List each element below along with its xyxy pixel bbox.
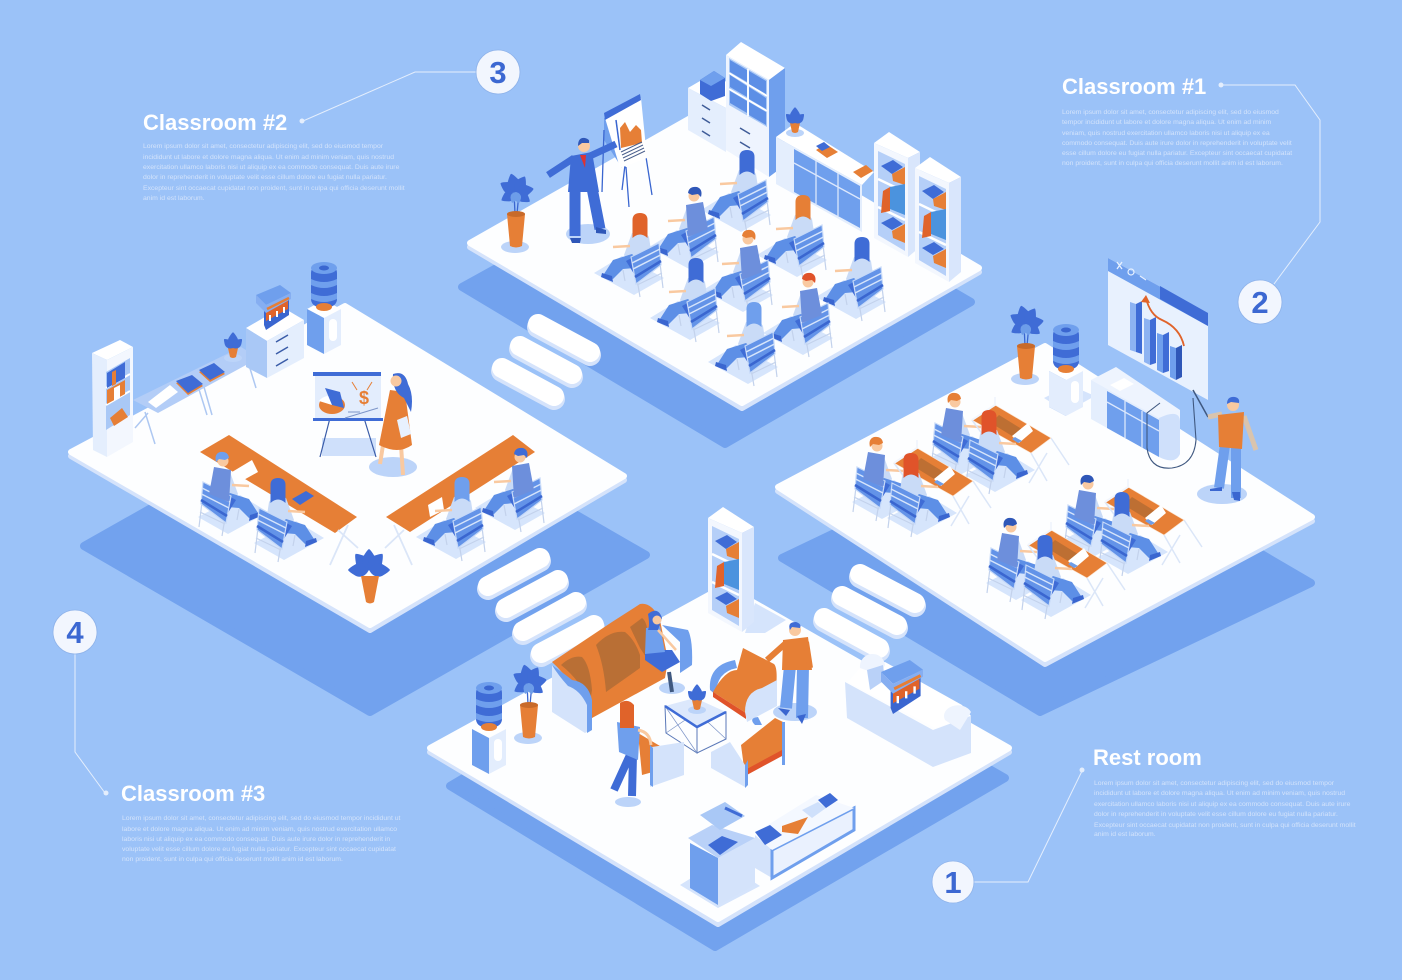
platform shadows xyxy=(84,150,1311,947)
water cooler xyxy=(472,682,506,774)
connector and badge 2: 2 xyxy=(1251,285,1269,320)
panel: classroom 3 right room xyxy=(778,258,1312,664)
stairs between rooms xyxy=(488,324,915,656)
bookshelf xyxy=(92,340,133,457)
armchair top xyxy=(710,648,777,722)
panel: classroom 1 top room xyxy=(470,42,979,408)
plant xyxy=(511,663,548,744)
drawer cabinet and coffee machine xyxy=(246,285,304,378)
coffee table xyxy=(665,684,726,753)
presenter xyxy=(548,138,616,244)
cable and pointer xyxy=(1147,390,1208,468)
easel with charts xyxy=(313,372,383,457)
text: Rest room: dolor in reprehenderit in voluptate velit esse cillum dolore eu fugiat nulla pariatur. xyxy=(1094,811,1338,818)
text: Classroom #3: Lorem ipsum dolor sit amet, consectetur adipiscing elit, sed do eiusmod tempor incididunt ut xyxy=(122,815,401,822)
standing man xyxy=(767,622,817,724)
teacher xyxy=(1197,397,1256,504)
text: Rest room: Excepteur sint occaecat cupidatat non proident, sunt in culpa qui officia deserunt mollit xyxy=(1094,822,1356,829)
panel: rest room bottom xyxy=(430,507,1009,924)
text: Classroom #3: Classroom #3 xyxy=(121,781,265,806)
connector and badge 1: 1 xyxy=(944,865,962,900)
armchair left and standing woman xyxy=(614,701,684,807)
easel with charts: $ xyxy=(359,388,369,408)
connector and badge 4 xyxy=(53,610,108,796)
connector and badge 3: 3 xyxy=(489,55,507,90)
text: Rest room: Lorem ipsum dolor sit amet, consectetur adipiscing elit, sed do eiusmod tempor xyxy=(1094,780,1335,787)
seated woman xyxy=(645,611,685,694)
text: Classroom #1: veniam, quis nostrud exercitation ullamco laboris nisi ut aliquip ex ea xyxy=(1062,130,1270,137)
connector and badge 4: 4 xyxy=(66,615,84,650)
text: Classroom #2: Lorem ipsum dolor sit amet, consectetur adipiscing elit, sed do eiusmod tempor xyxy=(143,143,384,150)
connector and badge 3 xyxy=(300,50,520,124)
bookshelves xyxy=(874,132,920,257)
tables xyxy=(200,435,357,533)
sideboard with books and plant xyxy=(776,107,874,232)
text: Classroom #1 xyxy=(1062,74,1292,167)
text: Classroom #1: Classroom #1 xyxy=(1062,74,1206,99)
small plant xyxy=(221,332,245,362)
text: Classroom #3: laboris nisi ut aliquip ex ea commodo consequat. Duis aute irure dolor in reprehenderit in xyxy=(122,836,390,843)
text: Classroom #2: exercitation ullamco laboris nisi ut aliquip ex ea commodo consequat. Duis aute irure xyxy=(143,164,400,171)
flipchart xyxy=(602,94,652,207)
connector and badge 1 xyxy=(932,768,1084,903)
copier xyxy=(680,802,760,908)
armchair right xyxy=(711,717,785,788)
text: Rest room xyxy=(1093,745,1356,838)
text: Rest room: incididunt ut labore et dolore magna aliqua. Ut enim ad minim veniam, quis nostrud xyxy=(1094,790,1345,797)
text: Classroom #1: Lorem ipsum dolor sit amet, consectetur adipiscing elit, sed do eiusmod xyxy=(1062,109,1279,116)
text: Classroom #2 xyxy=(143,110,405,202)
sideboard xyxy=(1091,367,1180,460)
text: Rest room: anim id est laborum. xyxy=(1094,831,1156,838)
plant xyxy=(498,172,535,253)
text: Classroom #3: non proident, sunt in culpa qui officia deserunt mollit anim id est laborum. xyxy=(122,856,343,863)
plant xyxy=(1008,304,1045,385)
seated people xyxy=(198,448,545,562)
water cooler xyxy=(1044,324,1095,416)
text: Classroom #1: commodo consequat. Duis aute irure dolor in reprehenderit in voluptate velit xyxy=(1062,140,1292,147)
text: Classroom #1: non proident, sunt in culpa qui officia deserunt mollit anim id est laborum. xyxy=(1062,160,1283,167)
text: Classroom #3: labore et dolore magna aliqua. Ut enim ad minim veniam, quis nostrud exercitation ullamco xyxy=(122,826,397,833)
panel: classroom 2 left room xyxy=(71,262,624,630)
text: Classroom #2: anim id est laborum. xyxy=(143,195,205,202)
connector and badge 2 xyxy=(1218,82,1320,324)
text: Classroom #2: incididunt ut labore et dolore magna aliqua. Ut enim ad minim veniam, quis nostrud xyxy=(143,154,394,161)
students in rows xyxy=(594,150,886,386)
text: Rest room: Rest room xyxy=(1093,745,1202,770)
tall cabinet with printer xyxy=(688,42,785,177)
text: Classroom #1: tempor incididunt ut labore et dolore magna aliqua. Ut enim ad minim xyxy=(1062,119,1272,126)
floor plant xyxy=(348,549,390,604)
text: Classroom #3 xyxy=(121,781,401,863)
reception counter with coffee machine xyxy=(845,654,971,767)
text: Classroom #2: Classroom #2 xyxy=(143,110,287,135)
student desks xyxy=(852,393,1202,619)
text: Classroom #2: dolor in reprehenderit in voluptate velit esse cillum dolore eu fugiat nulla pariatur. xyxy=(143,174,387,181)
bookshelf xyxy=(708,507,786,633)
woman presenting xyxy=(369,373,417,477)
water cooler xyxy=(307,262,341,354)
sofa xyxy=(552,604,692,733)
text: Rest room: exercitation ullamco laboris nisi ut aliquip ex ea commodo consequat. Duis aute irure xyxy=(1094,801,1351,808)
document table xyxy=(755,793,854,878)
long desk xyxy=(133,347,259,444)
text: Classroom #2: Excepteur sint occaecat cupidatat non proident, sunt in culpa qui officia deserunt mollit xyxy=(143,185,405,192)
text: Classroom #1: esse cillum dolore eu fugiat nulla pariatur. Excepteur sint occaecat cupidatat xyxy=(1062,150,1292,157)
text: Classroom #3: voluptate velit esse cillum dolore eu fugiat nulla pariatur. Excepteur sint occaecat cupidatat xyxy=(122,846,396,853)
screen with chart xyxy=(1108,258,1208,400)
